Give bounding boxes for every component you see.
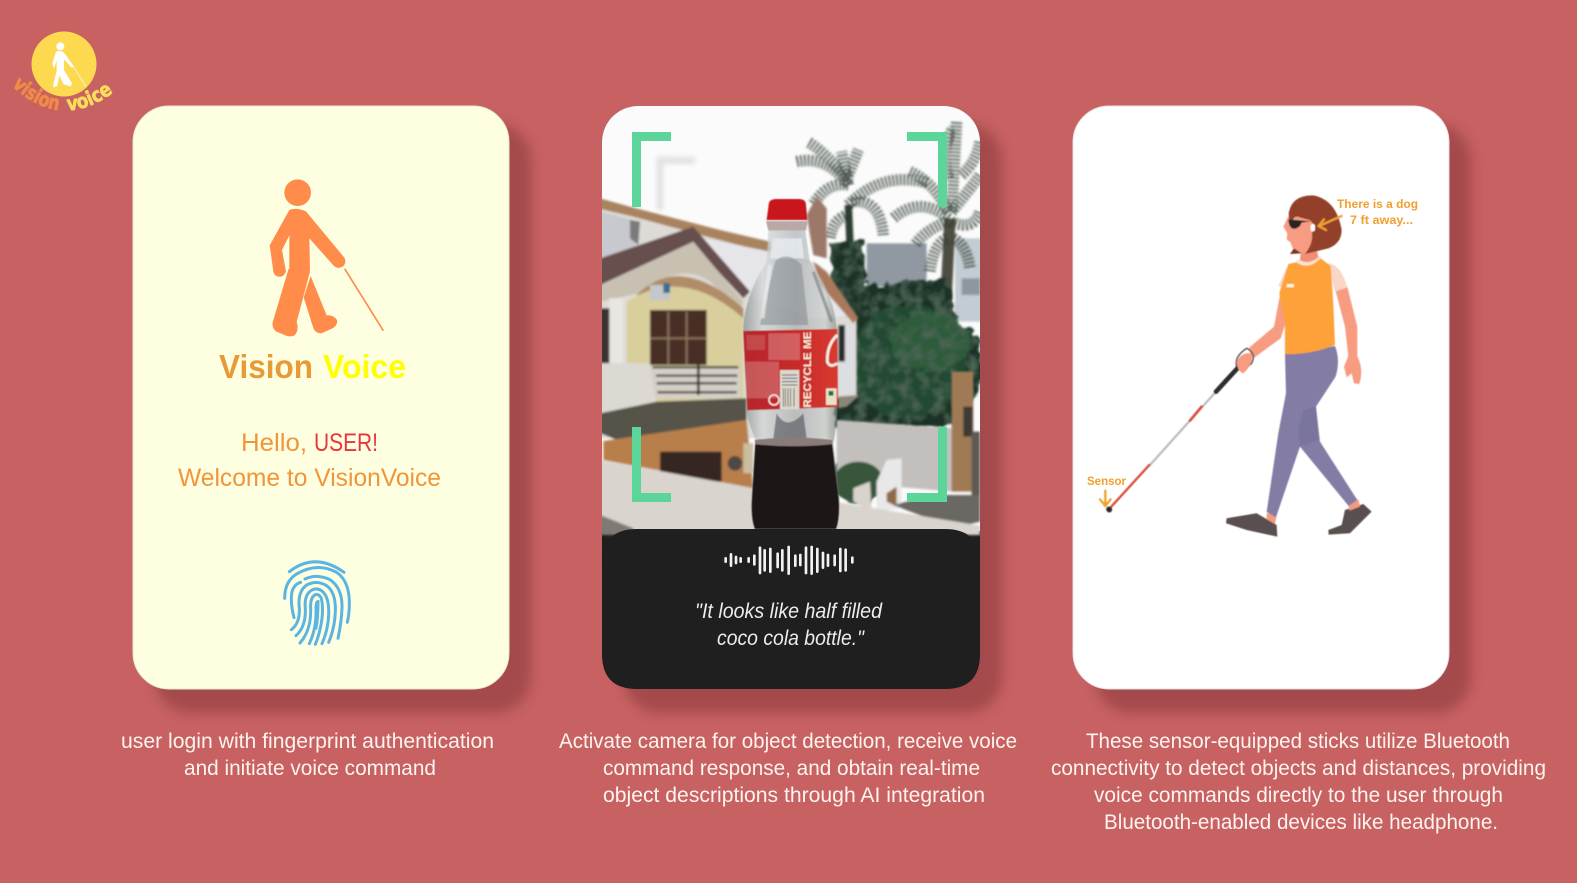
spoken quote: "It looks like half filled	[695, 600, 883, 623]
panel: login screen	[133, 106, 509, 689]
face	[1283, 212, 1315, 254]
sunglasses	[1288, 219, 1311, 229]
bottle label	[743, 329, 838, 410]
palm trees	[797, 122, 980, 322]
panel: camera object detection	[600, 106, 983, 689]
callout: voice message: There is a dog	[1337, 197, 1418, 211]
caption: camera: command response, and obtain real-time	[603, 757, 980, 780]
detection brackets	[636, 136, 942, 498]
cola liquid	[752, 442, 839, 529]
card shadows	[155, 124, 1471, 713]
foliage	[830, 238, 980, 503]
arrow to ear	[1319, 216, 1342, 230]
welcome text: USER!	[314, 429, 378, 457]
caption: login: user login with fingerprint authentication	[121, 730, 494, 753]
heading: Vision Voice: Vision	[219, 348, 313, 385]
background buildings	[867, 238, 983, 322]
spoken quote	[695, 600, 883, 650]
t-shirt	[1279, 257, 1335, 354]
icon: fingerprint	[285, 562, 349, 644]
hand on grip	[1237, 353, 1252, 373]
panel: smart cane illustration	[1073, 106, 1449, 689]
spoken quote: coco cola bottle."	[717, 627, 865, 650]
bottle	[743, 199, 839, 529]
bottle cap	[767, 199, 807, 220]
caption: camera: object descriptions through AI integration	[603, 784, 985, 807]
cane	[1109, 348, 1253, 510]
caption: smart cane: Bluetooth-enabled devices like headphone.	[1104, 811, 1498, 834]
logo: vision voice	[14, 32, 112, 111]
caption: camera: Activate camera for object detection, receive voice	[559, 730, 1017, 753]
caption: login: and initiate voice command	[184, 757, 436, 780]
logo wordmark	[14, 78, 112, 111]
hair	[1289, 195, 1342, 254]
caption: smart cane: These sensor-equipped sticks utilize Bluetooth	[1086, 730, 1510, 753]
logo wordmark: voice	[66, 85, 112, 111]
heading: Vision Voice	[219, 348, 406, 385]
earbud	[1311, 224, 1315, 231]
photo: bottle in front of house	[600, 106, 983, 535]
caption: smart cane: voice commands directly to the user through	[1094, 784, 1503, 807]
house	[600, 197, 980, 535]
neck	[1300, 245, 1318, 262]
voice response panel	[602, 529, 980, 689]
icon: walking person with cane	[270, 179, 383, 336]
logo wordmark: vision	[14, 78, 59, 110]
caption: camera	[559, 730, 1017, 807]
bottle: RECYCLE ME	[802, 331, 814, 408]
near arm and hand	[1248, 292, 1287, 358]
caption: smart cane: connectivity to detect objects and distances, providing	[1051, 757, 1546, 780]
caption: smart cane	[1051, 730, 1546, 834]
icon: logo walking figure	[52, 42, 86, 87]
welcome text: Hello,	[241, 429, 307, 457]
icon: sound waveform	[726, 547, 852, 574]
welcome text	[178, 429, 441, 492]
label: sensor: Sensor	[1087, 474, 1126, 488]
heading: Vision Voice: Voice	[323, 348, 406, 385]
t-shirt sleeves	[1327, 263, 1347, 292]
callout: voice message	[1337, 197, 1418, 227]
back arm and hand	[1335, 287, 1361, 384]
callout: voice message: 7 ft away...	[1350, 213, 1413, 227]
ghost reflection	[657, 157, 695, 210]
trousers	[1267, 346, 1357, 517]
caption: login	[121, 730, 494, 780]
shoes	[1226, 513, 1277, 537]
illustration: woman walking with cane	[1100, 195, 1372, 537]
arrow to sensor	[1100, 491, 1111, 506]
welcome text: Welcome to VisionVoice	[178, 464, 441, 492]
